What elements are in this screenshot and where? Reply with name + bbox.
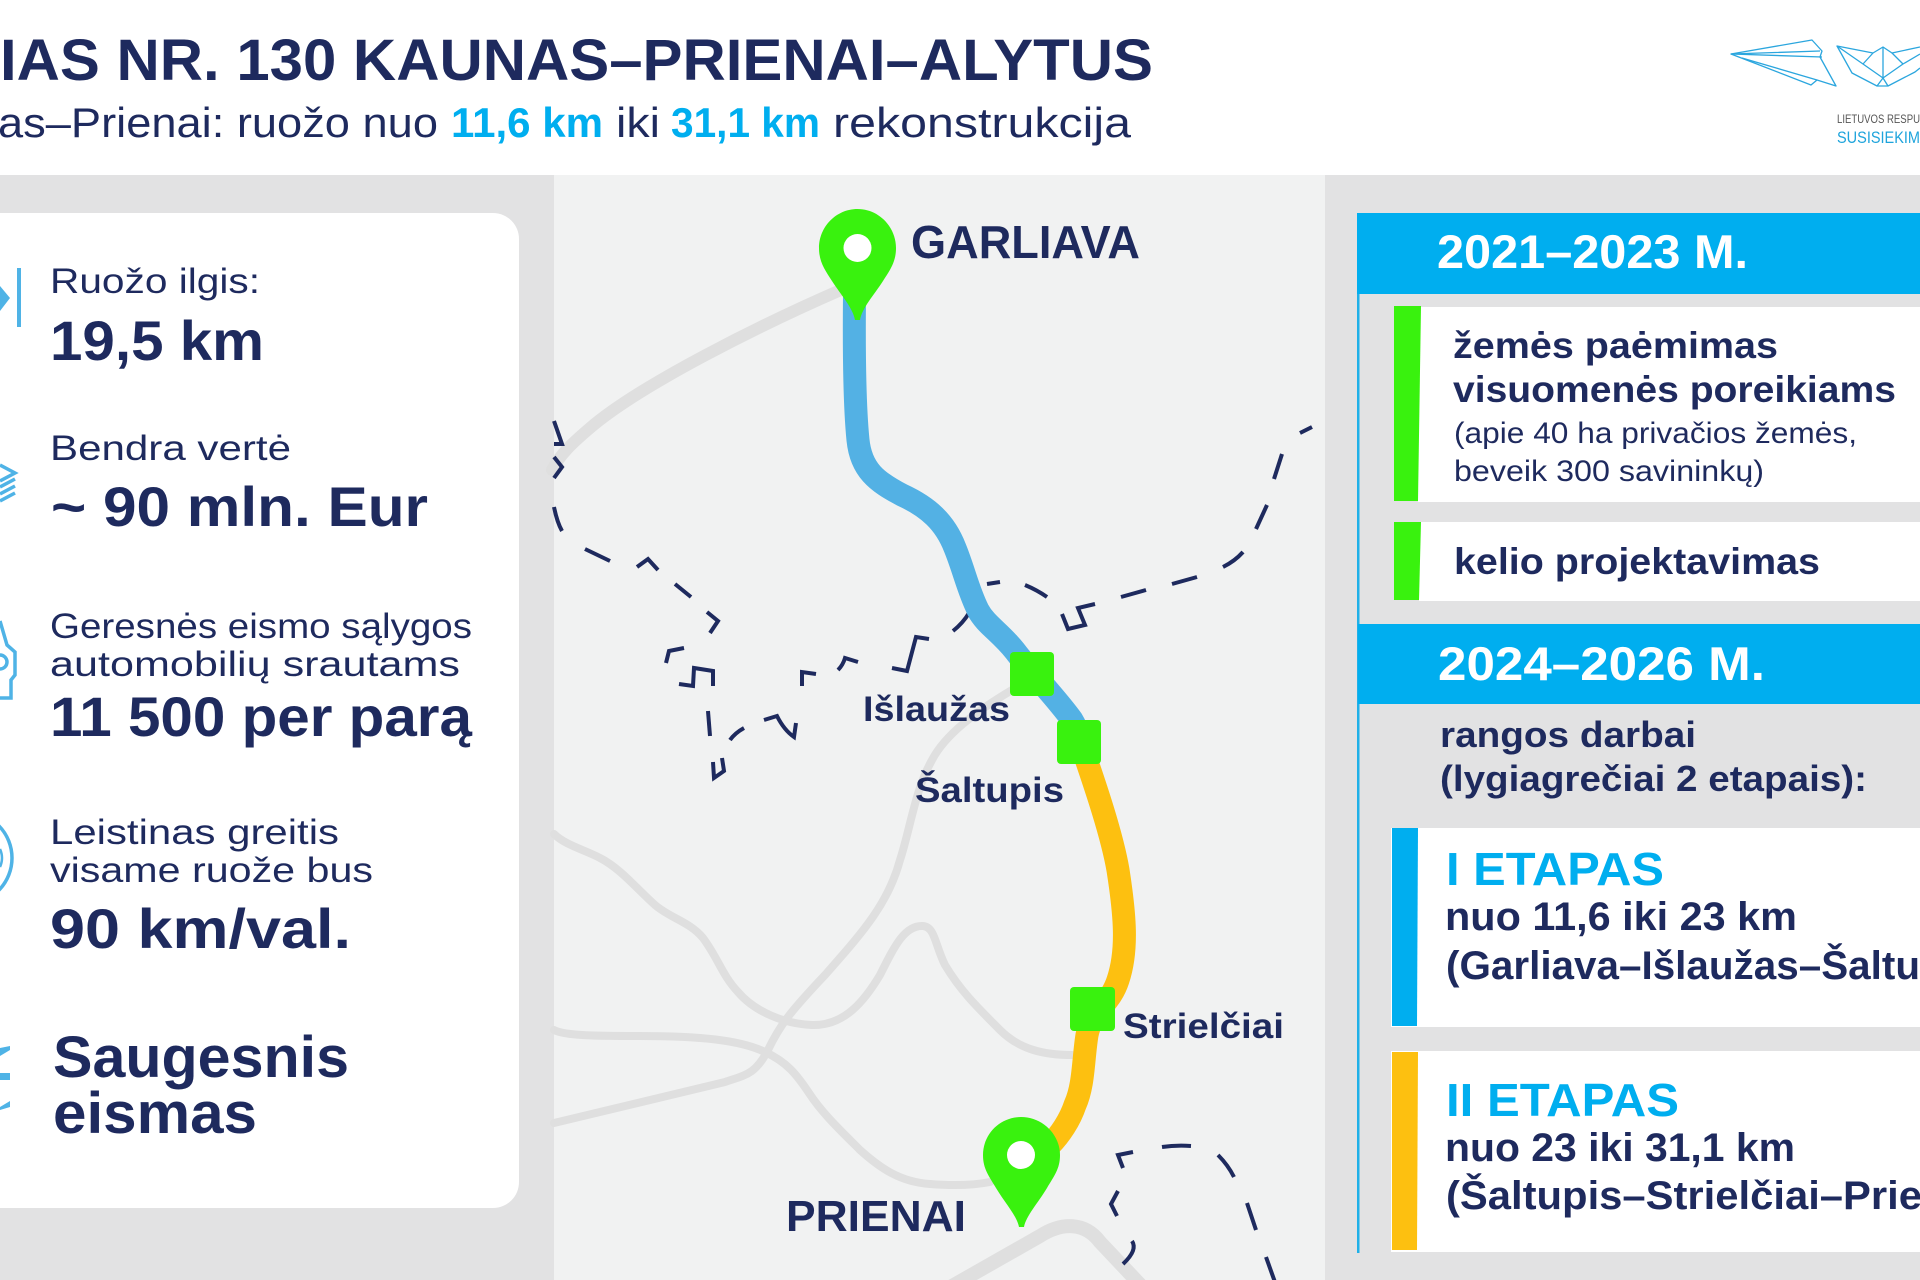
panel: timeline [1357,213,1920,1253]
header: 2021–2023: 2021–2023 M. [1437,225,1748,278]
icon: paper plane [1731,40,1836,86]
fact: safety [0,1025,349,1146]
fact: value [0,429,428,538]
card: stage I: I ETAPAS [1446,843,1664,895]
label: Prienai: PRIENAI [786,1192,966,1241]
route: stage II yellow [1050,750,1124,1145]
card: stage II: II ETAPAS [1446,1074,1679,1126]
pin: Garliava [819,209,896,320]
text: construction intro [1440,714,1867,799]
header: 2024–2026 [1358,624,1920,704]
card: land acquisition: beveik 300 savininkų) [1454,455,1764,488]
card: stage I: (Garliava–Išlaužas–Šaltu [1446,942,1920,988]
card: land acquisition: žemės paėmimas [1453,325,1778,366]
logo: ministry [1731,40,1920,147]
fact: traffic: Geresnės eismo sąlygos [50,607,472,646]
map: dashed roads [554,421,1312,1280]
icon: safety lines [0,1046,10,1110]
map: grey roads [552,289,1150,1280]
fact: speed [0,812,373,960]
fact: value: Bendra vertė [50,429,291,468]
pin: Prienai [983,1117,1060,1227]
text: construction intro: rangos darbai [1440,714,1696,755]
interchange marker: Šaltupis [1057,720,1101,764]
panel: key facts [0,213,519,1208]
subtitle: rekonstrukcija [833,99,1132,146]
label: Išlaužas: Išlaužas [863,690,1010,729]
fact: value: ~ 90 mln. Eur [51,475,428,538]
text: construction intro: (lygiagrečiai 2 etapais): [1440,758,1867,799]
header: 2021–2023 [1357,213,1920,294]
label: Garliava: GARLIAVA [911,216,1140,268]
subtitle: iki [616,99,660,146]
card: land acquisition: visuomenės poreikiams [1453,369,1896,410]
card: stage II: nuo 23 iki 31,1 km [1445,1126,1795,1170]
subtitle: 11,6 km [451,99,603,146]
interchange marker: Strielčiai [1070,987,1115,1031]
panel: map [552,209,1312,1280]
subtitle: as–Prienai: ruožo nuo [0,99,438,146]
card: stage II [1391,1051,1920,1252]
fact: safety: Saugesnis [53,1025,349,1090]
card: stage I: nuo 11,6 iki 23 km [1445,895,1797,939]
icon: paper boat [1837,46,1920,86]
fact: safety: eismas [53,1081,257,1146]
fact: speed: Leistinas greitis [50,813,339,852]
interchange marker: Išlaužas [1010,652,1054,696]
logo text [1837,112,1920,147]
card: land acquisition: (apie 40 ha privačios žemės, [1454,417,1857,450]
subtitle [0,99,1132,146]
fact: traffic: automobilių srautams [50,645,460,684]
subtitle: 31,1 km [671,99,820,146]
icon: length arrow [0,268,21,327]
title: IAS NR. 130 KAUNAS–PRIENAI–ALYTUS [0,28,1153,93]
fact: traffic: 11 500 per parą [50,685,473,748]
fact: length [0,262,264,372]
fact: speed: 90 km/val. [50,897,351,960]
route: stage I blue [854,295,1083,750]
label: Strielčiai: Strielčiai [1123,1007,1284,1046]
fact: traffic [0,607,473,748]
card: land acquisition [1394,306,1920,502]
card: road design: kelio projektavimas [1454,541,1820,582]
icon: car [0,621,15,698]
fact: length: 19,5 km [50,309,264,372]
header: 2024–2026: 2024–2026 M. [1438,637,1765,690]
icon: speed sign [0,812,12,904]
card: stage I [1391,828,1920,1027]
card: stage II: (Šaltupis–Strielčiai–Prie [1446,1172,1920,1218]
icon: money stack [0,465,15,501]
fact: speed: visame ruože bus [50,851,373,890]
label: Šaltupis: Šaltupis [915,770,1064,810]
fact: length: Ruožo ilgis: [50,262,260,301]
card: road design [1394,522,1920,601]
